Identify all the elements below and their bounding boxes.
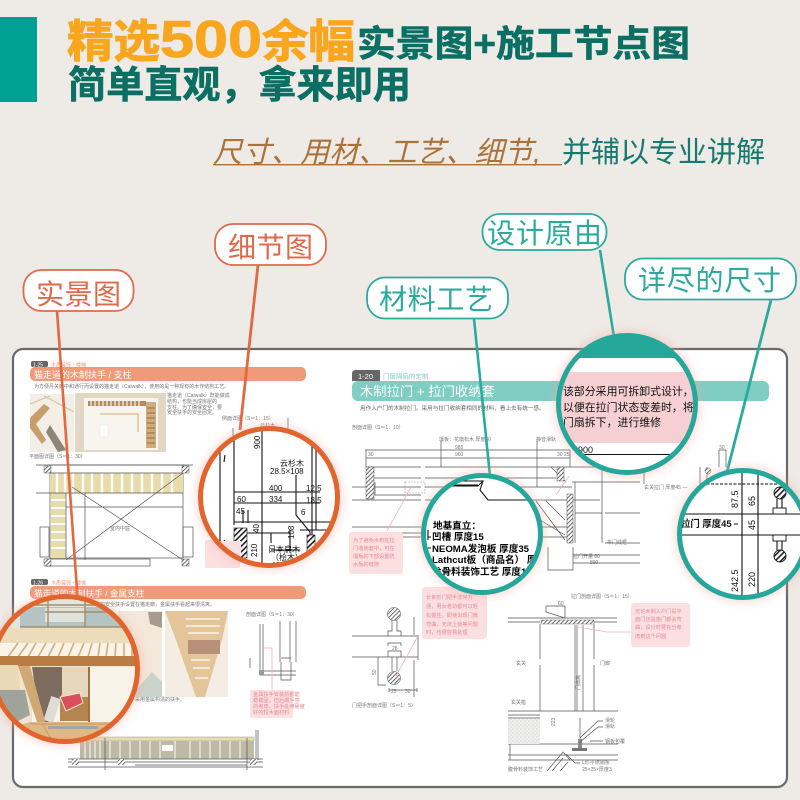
door section drawing: 60 [558, 601, 564, 607]
floor plan [29, 453, 193, 566]
magnifier: design reason [555, 332, 700, 476]
main section drawing: 890 [590, 560, 599, 566]
panel: book spread [13, 349, 787, 787]
handrail section drawing [246, 611, 298, 690]
note: handle [422, 587, 487, 639]
magnifier: detail drawing: 45 [236, 507, 245, 516]
main section drawing: 960 [455, 452, 464, 458]
section header 1-26: 1-26 [33, 580, 43, 586]
magnifier: dimensions: 65 [747, 496, 757, 506]
connector: 详尽的尺寸 [727, 300, 771, 472]
magnifier: detail drawing: 108 [287, 525, 296, 539]
main section drawing: 985 [455, 445, 464, 451]
handle section drawing: 50 [372, 669, 378, 675]
magnifier: detail drawing: 900 [253, 435, 262, 449]
note: handle: 松握住。即使出现门扇 [426, 611, 478, 619]
title line 1: 余幅 [262, 16, 355, 67]
section header 1-20: 木制拉门 + 拉门收纳套 [360, 384, 495, 399]
title line 1 [67, 11, 690, 69]
magnifier: detail drawing [197, 420, 341, 570]
main section drawing: 拉门开量 80 [573, 553, 600, 560]
note: metal handrail [250, 690, 305, 718]
main section drawing: 壤板：花旗松木 厚度30 [439, 436, 491, 443]
section header 1-26: 手采用金属构造的扶手。 [130, 696, 185, 703]
magnifier: dimensions: 87.5 [730, 490, 740, 508]
title line 1: 精选 [67, 16, 160, 67]
floor plan: 平面图详图（S＝1：30） [29, 453, 86, 460]
note: handle: 长条形门把手非常方 [426, 593, 473, 601]
handle section drawing: 25 [391, 689, 397, 695]
main section drawing: 静音滑轨 [536, 436, 556, 443]
magnifier: detail drawing: 18.5 [306, 496, 322, 505]
section header 1-25: 为方便丹关廊中和通行而设置的猫走道（Catwalk），使用的是一种现有的木作结构工艺。 [34, 383, 229, 390]
photo: white room [118, 611, 162, 697]
note: pink small [205, 540, 240, 568]
photo: catwalk view [30, 394, 74, 452]
header accent block [0, 17, 37, 102]
connector: 材料工艺 [474, 319, 490, 476]
note: metal handrail: 稳稳固，但后期手感 [253, 696, 300, 704]
handrail section drawing: 剖面详图（S＝1：30） [246, 611, 298, 618]
section header 1-20: 门窗隔扇的定制 [383, 372, 429, 380]
section drawing caption [222, 415, 288, 450]
note: waterproof: 水板的缝隙 [353, 560, 379, 568]
door section drawing: 223 [551, 717, 557, 726]
callout: 详尽的尺寸: 详尽的尺寸 [638, 265, 781, 296]
handle section drawing [352, 608, 418, 709]
note: handle: 时，也很容易处理 [426, 628, 468, 636]
door section drawing: 钢板包覆 [605, 738, 625, 745]
door section drawing: 门扇高 [575, 675, 582, 690]
callout: 材料工艺: 材料工艺 [379, 284, 493, 315]
magnifier: dimensions: 242.5 [730, 569, 740, 592]
callout: 设计原由: 设计原由 [487, 218, 602, 249]
connector: 细节图 [240, 265, 258, 430]
floor plan: 室内中庭 [110, 525, 130, 532]
magnifier: dimensions [675, 467, 800, 601]
note: metal handrail: 好的短木面材料 [253, 708, 289, 716]
magnifier: detail drawing: （桧木） [271, 552, 303, 562]
callout: 详尽的尺寸 [625, 258, 796, 300]
door section drawing: 滑轮 [605, 717, 615, 724]
magnifier: design reason: 以便在拉门状态变差时，将 [563, 400, 694, 414]
callout: 材料工艺 [367, 278, 508, 318]
note: door warp: 无论木制入户门是平 [635, 607, 682, 615]
note: waterproof: 门收纳套中，可在 [353, 544, 395, 552]
note: door warp: 虑到这个问题 [635, 632, 666, 640]
main section drawing [352, 436, 726, 570]
magnifier: material: 龙骨料装饰工艺 厚度1 [432, 566, 527, 578]
door section drawing: 25×25×厚度3 [582, 766, 612, 773]
left page content [29, 361, 306, 770]
magnifier: dimensions: 220 [747, 572, 757, 587]
title line 1: 实景图+施工节点图 [357, 23, 690, 64]
section header 1-20 [352, 370, 769, 431]
photo: top view room [75, 393, 166, 452]
note: waterproof: 壤板的下部设置防 [353, 552, 395, 560]
main section drawing: 30 [719, 445, 725, 451]
title line 2: 简单直观，拿来即用 [68, 64, 411, 107]
note: waterproof: 为了避免水积在拉 [353, 536, 395, 544]
magnifier: detail drawing: 400 [269, 484, 283, 493]
magnifier: detail drawing: 云杉木 [280, 458, 304, 468]
subtitle [213, 136, 765, 169]
door section drawing: 玄关槛 [511, 699, 526, 706]
section header 1-26: 的安全扶手设置在猫走廊，金属扶手看起来很清爽。 [100, 601, 215, 608]
magnifier: detail drawing: 日本扁木 [268, 544, 300, 554]
magnifier: detail drawing: 6 [301, 508, 306, 517]
section header 1-25 [30, 361, 306, 390]
main section drawing: 玄关拉门 厚度45 — [644, 484, 687, 491]
note: metal handrail: 的考虑，扶手处用硬度 [253, 702, 305, 710]
handle section drawing: 28 [392, 646, 398, 652]
subtitle: 尺寸、用材、工艺、细节, [213, 137, 541, 169]
callout: 实景图 [24, 270, 134, 311]
note: handle: 弯曲、无法上锁等问题 [426, 620, 478, 628]
door section drawing: 玄关 [516, 660, 526, 667]
door section drawing: 腹骨料装饰工艺 [508, 766, 543, 773]
door section drawing: 滑轨 [605, 723, 615, 730]
subtitle: 并辅以专业讲解 [562, 136, 765, 169]
magnifier: dimensions: 45 [747, 520, 757, 530]
note text: 安全扶手的安全固定。 [167, 409, 217, 416]
note text [167, 392, 230, 416]
door section drawing: 门廊 [600, 660, 610, 667]
note text: 猫走道（Catwalk）既能做成 [167, 392, 230, 399]
handle section drawing: 30 [405, 689, 411, 695]
note: metal handrail: 金属扶手安装前都能 [253, 690, 300, 698]
handle section drawing: 门把手剖面详图（S＝1：5） [352, 702, 416, 709]
magnifier: dimensions: 拉门 厚度45 [681, 518, 732, 529]
main section drawing: 30 25 [557, 452, 570, 458]
magnifier: detail drawing: 12.5 [306, 484, 322, 493]
note: door warp: 面门还是格门都会弯 [635, 615, 682, 623]
door section drawing: L形不锈钢条 [582, 759, 610, 766]
magnifier: material: NEOMA发泡板 厚度35 [432, 543, 530, 555]
callout: 细节图: 细节图 [228, 232, 313, 263]
magnifier: design reason: 900 [578, 445, 593, 455]
section header 1-25: 1-25 [33, 362, 43, 368]
section header 1-26: 猫走道的木制扶手 / 金属支柱 [34, 588, 145, 598]
main section drawing: 30 [368, 452, 374, 458]
door section drawing [508, 593, 633, 773]
callout: 细节图 [215, 224, 326, 265]
section header 1-26 [30, 579, 306, 703]
magnifier: design reason: 该部分采用可拆卸式设计， [563, 384, 694, 398]
door section drawing: 拉门剖面详图（S＝1：15） [571, 593, 633, 600]
magnifier: design reason: 门扇拆下，进行维修 [563, 415, 661, 429]
magnifier: detail drawing: 40×88 [271, 561, 294, 570]
magnifier: detail drawing: 210 [250, 543, 259, 557]
section header 1-20: 剖面详图（S＝1：10） [352, 424, 404, 431]
magnifier: scene photo [0, 593, 141, 745]
magnifier: material: 地基直立： [433, 520, 481, 532]
connector: 实景图 [57, 311, 78, 604]
section header 1-20: 1-20 [358, 372, 373, 381]
note: waterproof [349, 532, 403, 574]
magnifier: detail drawing: 60 [237, 495, 246, 504]
note: door warp: 曲，设计时要充分考 [635, 623, 682, 631]
title line 1: 500 [160, 11, 262, 69]
section header 1-26: 木质装饰・楼梯 [51, 579, 86, 586]
right page content [349, 370, 769, 773]
section header 1-25: 木质装饰・楼梯 [51, 361, 86, 368]
elevation drawing [68, 730, 263, 770]
section header 1-25: 猫走道的木制扶手 / 支柱 [34, 369, 132, 380]
magnifier: detail drawing: 28.5×108 [270, 467, 304, 476]
magnifier: material: Lathcut板（商品名） 厚 [432, 554, 537, 566]
section drawing caption: 侧面详图（S＝1：15） [222, 415, 274, 422]
photo: stair from below [165, 611, 228, 697]
section header 1-20: 用作入户门的木制拉门。采用与拉门收纳套相同的材料，看上去有统一感。 [360, 404, 545, 412]
magnifier: material [420, 472, 545, 596]
magnifier: detail drawing: 40 [252, 524, 261, 533]
callout: 实景图: 实景图 [36, 279, 121, 310]
note text: 结构，也能当成房屋的 [167, 398, 217, 405]
main section drawing: 平门线框 [607, 539, 627, 546]
note: handle: 便，男女老幼都可以轻 [426, 602, 478, 610]
magnifier: detail drawing: 334 [269, 495, 283, 504]
note text: 支柱。为了确保安全，要 [167, 404, 222, 411]
note: door warp [631, 603, 690, 647]
section drawing caption: 云杉木 [260, 422, 275, 429]
connector: 设计原由 [600, 250, 614, 337]
magnifier: material: 凹槽 厚度15 [432, 531, 484, 543]
